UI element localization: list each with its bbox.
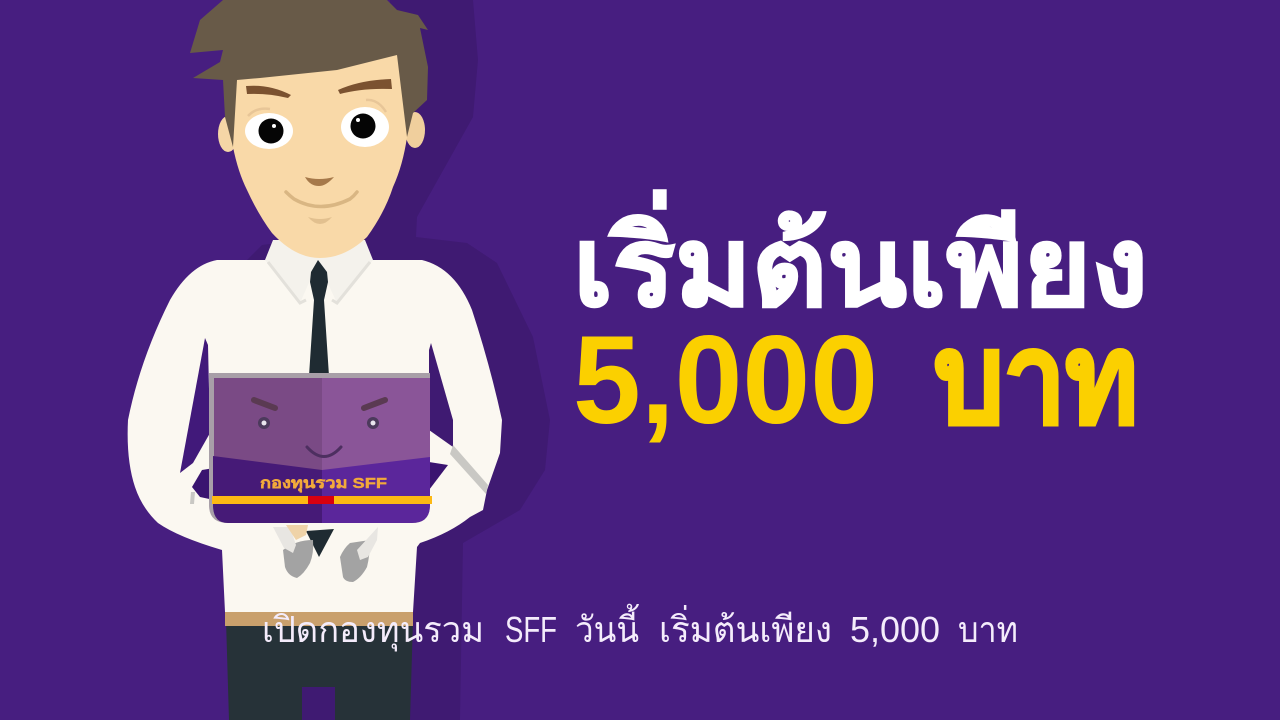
fingers below box: left (283, 540, 313, 578)
thumb skin (286, 525, 308, 540)
fingers below box: right (340, 540, 370, 582)
right eyelid crease (366, 100, 386, 112)
right eyebrow (338, 79, 392, 94)
lower tie tip (306, 529, 334, 557)
finger highlight right (357, 527, 378, 560)
subtitle caption (262, 603, 1018, 652)
shirt and arms (128, 260, 502, 612)
box edge (209, 373, 430, 523)
left eyelid crease (248, 109, 270, 116)
tie (309, 260, 329, 376)
left hand finger shading (190, 492, 195, 504)
belt (225, 610, 413, 626)
dark gap under left hand (192, 468, 214, 500)
character drop shadow (245, 0, 550, 720)
headline amount: 5,000 (573, 311, 878, 450)
fund label: กองทุนรวม SFF (260, 475, 387, 493)
dark gap under right hand (429, 462, 448, 490)
smile (307, 447, 341, 456)
smile (286, 192, 357, 206)
gap between left arm and torso (180, 338, 210, 473)
left eye (258, 417, 270, 429)
ear left (218, 116, 238, 152)
collar (265, 240, 373, 303)
subtitle caption: เปิดกองทุนรวม (262, 609, 484, 652)
yellow stripe (212, 496, 432, 504)
subtitle caption: บาท (958, 609, 1018, 650)
headline line 1: เริ่มต้นเพียง (573, 190, 1148, 329)
headline (573, 190, 1148, 450)
trousers (226, 620, 413, 720)
upper right face (322, 378, 430, 470)
chin mark (308, 217, 332, 224)
upper left face (214, 378, 322, 470)
gap between right arm and torso (429, 343, 453, 447)
character: businessman (128, 0, 502, 720)
right hand finger shading (450, 445, 488, 494)
nose (305, 177, 334, 186)
subtitle caption: วันนี้ (575, 603, 640, 650)
ear right (405, 112, 425, 148)
lower right flap (322, 457, 430, 523)
product box: SFF fund mascot (209, 373, 432, 523)
right eye (341, 107, 389, 147)
lower left flap (213, 456, 322, 523)
hair (190, 0, 428, 147)
finger highlight left (273, 527, 296, 553)
left eyebrow (254, 400, 275, 408)
collar shading (268, 262, 370, 303)
left eyebrow (246, 86, 291, 98)
red clasp (308, 496, 334, 504)
left eye (245, 113, 293, 149)
headline unit: บาท (934, 310, 1138, 449)
subtitle caption: 5,000 (850, 609, 940, 650)
subtitle caption: เริ่มต้นเพียง (659, 605, 832, 650)
subtitle caption: SFF (505, 609, 557, 650)
right eyebrow (364, 400, 385, 408)
face (233, 50, 407, 258)
right eye (367, 417, 379, 429)
